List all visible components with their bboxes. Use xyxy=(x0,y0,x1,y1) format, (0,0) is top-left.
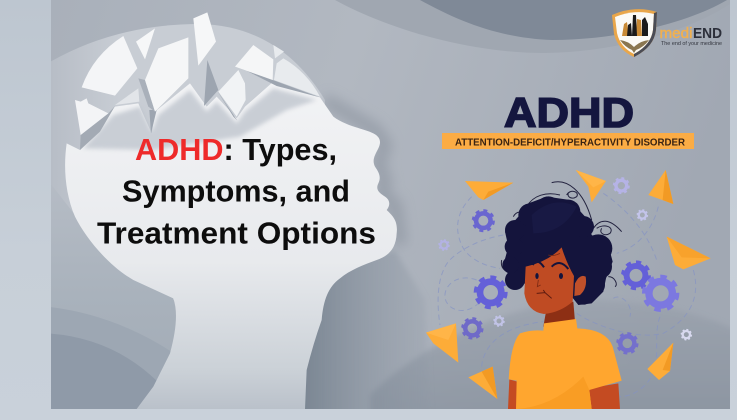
cracked skull shards xyxy=(75,12,320,150)
paper planes xyxy=(426,170,711,399)
illustration: distracted person with gears and paper planes xyxy=(426,170,711,409)
background hill: lower right xyxy=(372,305,730,409)
banner: attention-deficit/hyperactivity disorder xyxy=(442,133,694,149)
hair sheen xyxy=(532,202,577,233)
person: arms xyxy=(508,379,620,409)
person: face xyxy=(524,247,574,314)
logo shield xyxy=(612,9,657,57)
background shape: left of neck xyxy=(51,207,176,409)
head top shadow xyxy=(83,88,317,150)
person: hair xyxy=(502,196,613,305)
title: ADHD types, symptoms and treatment options: ADHD: Types, xyxy=(135,132,337,167)
dashed thought paths xyxy=(438,193,696,397)
head silhouette xyxy=(65,82,397,409)
title: ADHD types, symptoms and treatment options: Symptoms, and xyxy=(122,174,350,208)
logo: mediEND xyxy=(612,9,722,57)
logo tagline: The end of your medicine xyxy=(661,41,722,47)
gears xyxy=(439,178,691,353)
person: shirt xyxy=(509,319,622,409)
heading: ADHD: ADHD xyxy=(504,89,634,136)
person: ear xyxy=(574,276,586,296)
crack shadows xyxy=(80,106,115,150)
banner: attention-deficit/hyperactivity disorder: ATTENTION-DEFICIT/HYPERACTIVITY DISORDER xyxy=(455,136,685,148)
background shape: right of neck xyxy=(305,251,422,409)
title: ADHD types, symptoms and treatment options: Treatment Options xyxy=(97,216,376,250)
loose hair strands xyxy=(501,182,622,287)
face shadow xyxy=(325,100,400,245)
title: ADHD types, symptoms and treatment options xyxy=(97,132,376,250)
logo wordmark: medi xyxy=(660,25,692,42)
logo: mediEND: END xyxy=(693,25,722,42)
person: neck xyxy=(543,302,575,327)
